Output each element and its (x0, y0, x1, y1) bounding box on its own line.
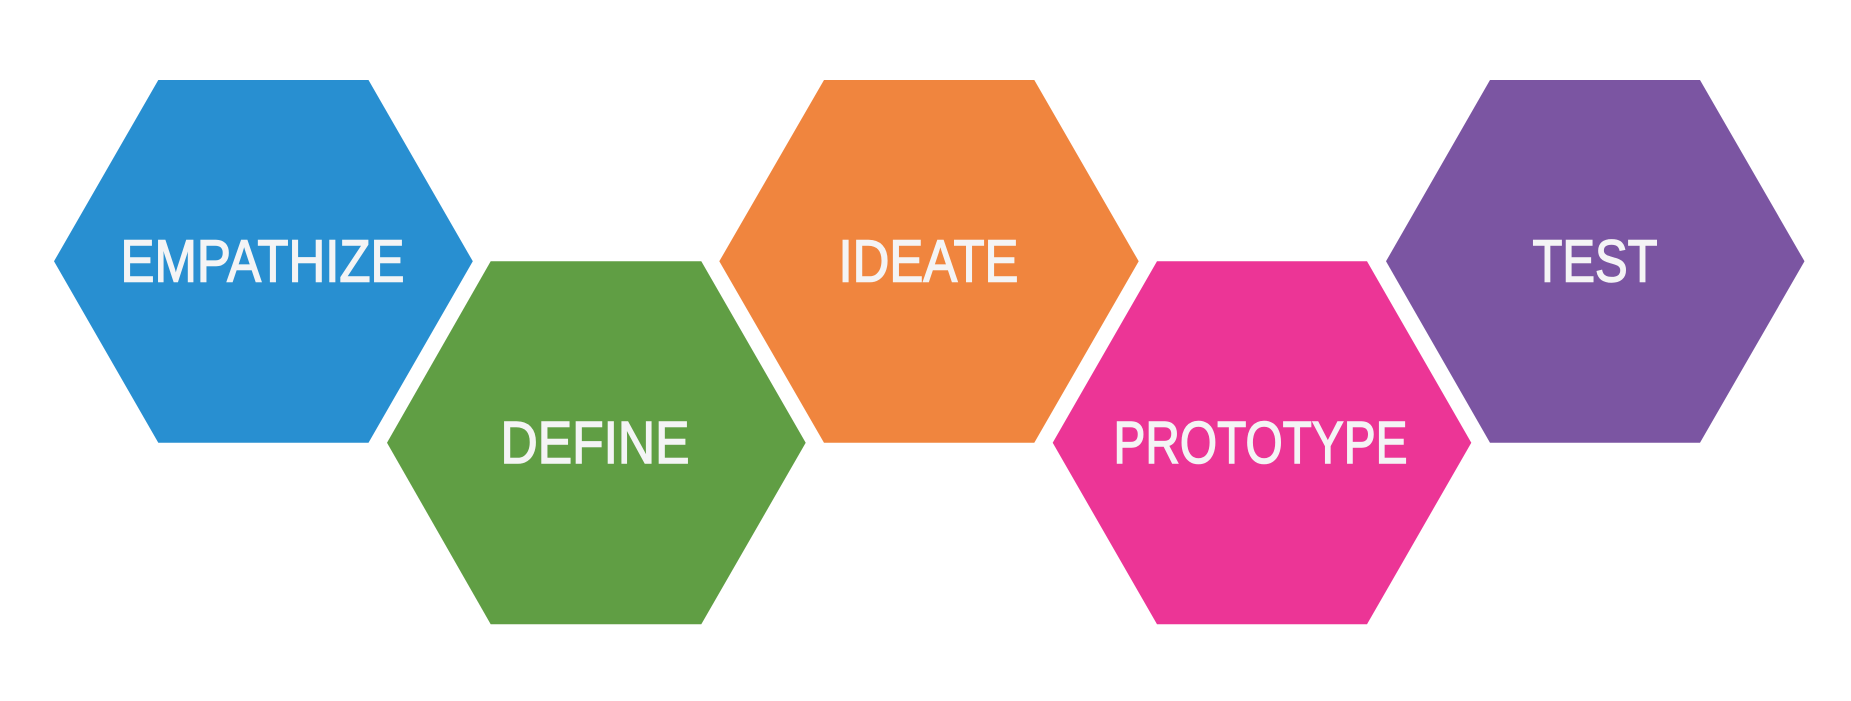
label: prototype: PROTOTYPE (1114, 410, 1408, 476)
panel: ideate (719, 80, 1139, 443)
panel: define (387, 261, 806, 624)
hexagon: define (387, 261, 806, 624)
panel: empathize (54, 80, 473, 443)
hexagon: prototype (1053, 261, 1471, 624)
label: define: DEFINE (500, 410, 690, 476)
hexagon: empathize (54, 80, 473, 443)
label: test: TEST (1532, 228, 1658, 294)
panel: test (1386, 80, 1804, 443)
panel: prototype (1053, 261, 1471, 624)
hexagon: ideate (719, 80, 1139, 443)
hexagon: test (1386, 80, 1804, 443)
label: ideate: IDEATE (838, 228, 1018, 294)
label: empathize: EMPATHIZE (120, 228, 404, 294)
